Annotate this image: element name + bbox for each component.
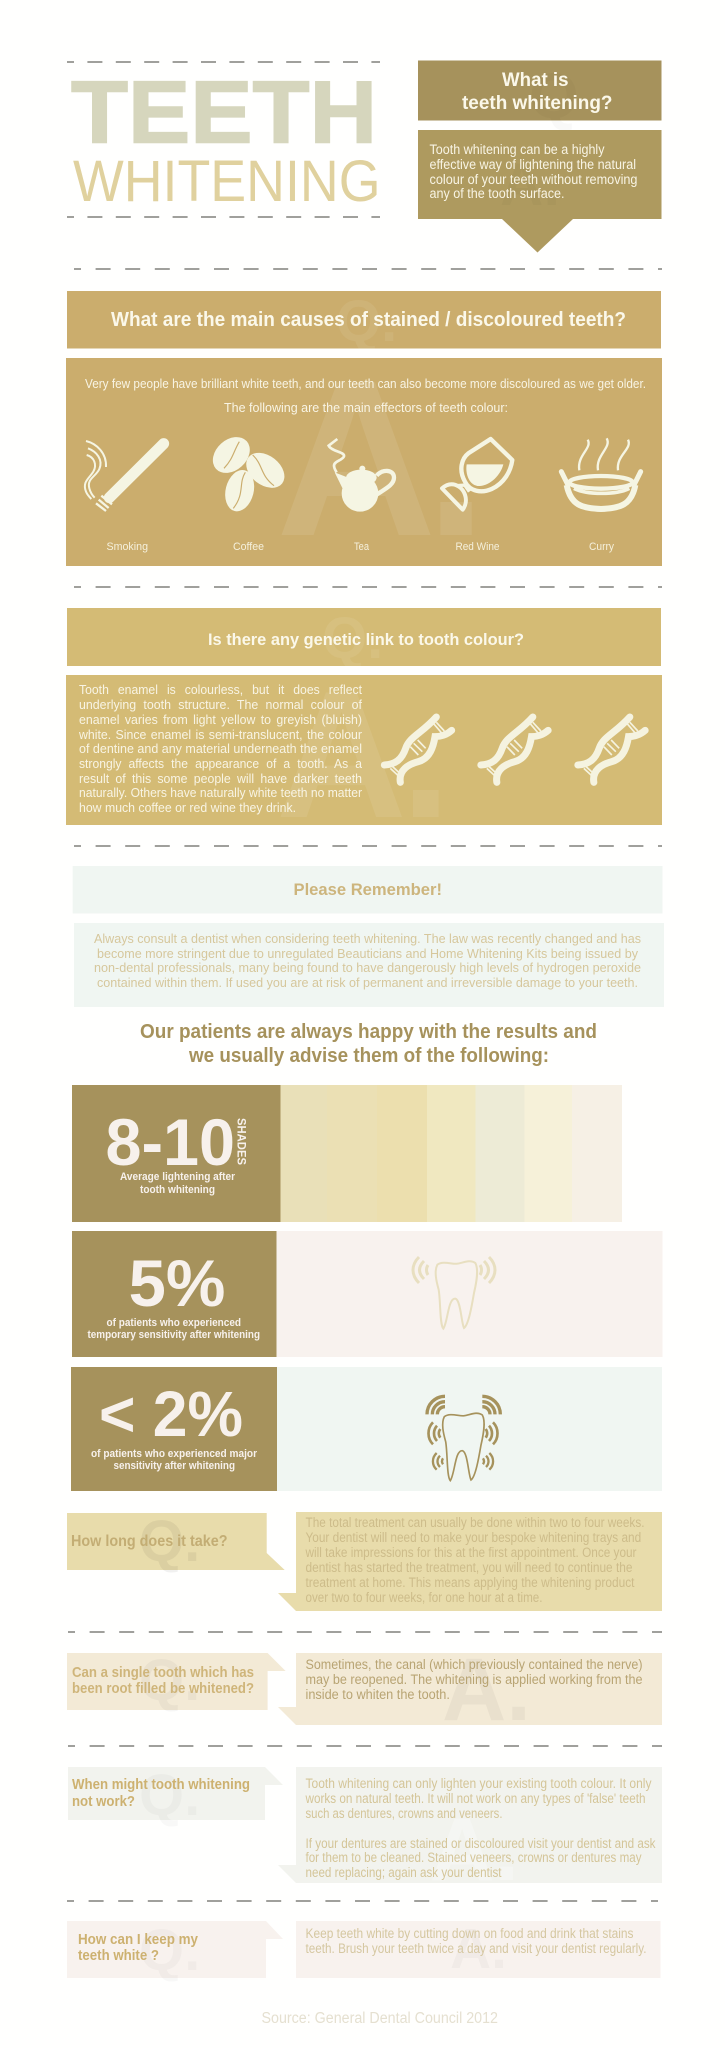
panel: please remember text: non-dental professionals, many being found to have dangerously high levels of hydrogen peroxide [94, 960, 641, 975]
panel: keep white answer [296, 1917, 660, 1981]
panel: root filled question: Can a single tooth which has [72, 1664, 254, 1681]
panel: root filled question: Q. [139, 1648, 200, 1713]
panel: keep white answer: A. [450, 1917, 507, 1981]
panel: causes answer: Very few people have brilliant white teeth, and our teeth can also become more discoloured as we get older. [85, 376, 646, 391]
panel: under 2% tooth [277, 1367, 662, 1491]
panel: under 2% stat: sensitivity after whitening [114, 1460, 235, 1472]
panel: when not work answer: Tooth whitening can only lighten your existing tooth colour. It only [306, 1776, 652, 1791]
panel: how long answer: The total treatment can usually be done within two to four weeks. [306, 1515, 644, 1530]
panel: what is teeth whitening heading: What is [502, 70, 568, 91]
panel: when not work answer: works on natural teeth. It will not work on any types of 'false' teeth [305, 1791, 646, 1806]
panel: what is teeth whitening answer: effective way of lightening the natural [430, 157, 636, 172]
panel: 8-10 shades stat: 8-10 [106, 1105, 235, 1179]
panel: 8-10 shades stat: SHADES [234, 1118, 248, 1165]
icon: dna 3 [578, 717, 645, 782]
panel: what is teeth whitening heading: Q [529, 60, 579, 132]
heading: patient results: we usually advise them of the following: [188, 1045, 549, 1067]
panel: under 2% stat: < 2% [99, 1378, 243, 1450]
label: Smoking: Smoking [106, 541, 148, 553]
panel: please remember text [74, 923, 664, 1007]
panel: genetic link question: Is there any genetic link to tooth colour? [208, 630, 524, 649]
panel: how long question [67, 1509, 285, 1574]
panel: keep white question [67, 1918, 283, 1983]
panel: genetic link answer: enamel varies from light yellow to greyish (bluish) [79, 712, 362, 727]
panel: 5% tooth [276, 1231, 662, 1357]
panel: causes question: What are the main causes of stained / discoloured teeth? [111, 309, 626, 331]
panel: when not work answer [278, 1767, 662, 1899]
panel: 5% stat: of patients who experienced [106, 1317, 241, 1329]
panel: genetic link answer: naturally. Others have naturally white teeth no matter [79, 785, 363, 800]
chart: shade strip [280, 1085, 622, 1222]
panel: keep white answer: Keep teeth white by cutting down on food and drink that stains [306, 1926, 634, 1941]
panel: root filled answer: inside to whiten the tooth. [306, 1687, 450, 1702]
label: Tea: Tea [354, 541, 370, 553]
panel: what is teeth whitening answer: Tooth whitening can be a highly [430, 142, 605, 157]
panel: keep white question: How can I keep my [78, 1931, 199, 1948]
panel: what is teeth whitening heading: teeth whitening? [462, 93, 612, 114]
panel: when not work answer: such as dentures, crowns and veneers. [306, 1806, 502, 1821]
panel: when not work answer: A. [430, 1799, 519, 1899]
panel: when not work answer: need replacing; again ask your dentist [306, 1865, 502, 1880]
heading: patient results: Our patients are always happy with the results and [140, 1021, 597, 1043]
icon: highly sensitive tooth [427, 1396, 500, 1481]
panel: please remember heading: Please Remember! [294, 880, 442, 899]
panel: keep white question: Q. [139, 1918, 200, 1983]
panel: genetic link answer: white. Since enamel is semi-translucent, the colour [78, 727, 363, 742]
panel: genetic link question [67, 606, 661, 671]
panel: causes answer: The following are the main effectors of teeth colour: [224, 400, 508, 415]
panel: when not work question: Q. [139, 1763, 200, 1828]
panel: what is teeth whitening answer: colour of your teeth without removing [430, 172, 638, 187]
panel: causes question [67, 289, 661, 354]
icon: dna 2 [481, 717, 548, 782]
panel: what is teeth whitening answer [418, 130, 662, 252]
panel: how long question: Q. [139, 1509, 200, 1574]
panel: how long answer: over two to four weeks, for one hour at a time. [306, 1590, 542, 1605]
panel: root filled question: been root filled be whitened? [72, 1680, 254, 1697]
panel: 5% stat: 5% [129, 1246, 226, 1320]
panel: keep white answer: teeth. Brush your teeth twice a day and visit your dentist regularly. [306, 1941, 646, 1956]
panel: root filled answer: Sometimes, the canal (which previously contained the nerve) [306, 1657, 642, 1672]
panel: causes answer: A. [276, 335, 476, 583]
panel: what is teeth whitening answer: A. [500, 151, 560, 218]
icon: coffee beans [206, 430, 291, 514]
icon: red wine glass [442, 439, 512, 510]
label: Coffee: Coffee [233, 541, 264, 553]
panel: how long answer [278, 1512, 662, 1611]
heading: patient results [140, 1021, 597, 1067]
icon: smoking [85, 441, 164, 511]
panel: 8-10 shades stat: tooth whitening [140, 1184, 215, 1196]
panel: please remember text: Always consult a dentist when considering teeth whitening. The law was recently changed and has [94, 931, 641, 946]
panel: when not work question [68, 1763, 283, 1828]
panel: root filled question [67, 1648, 286, 1713]
panel: please remember text: contained within them. If used you are at risk of permanent and irreversible damage to your teeth. [97, 975, 638, 990]
panel: 5% stat [72, 1231, 276, 1357]
title: Teeth Whitening: TEETH [71, 62, 377, 162]
panel: root filled answer [278, 1639, 662, 1739]
panel: genetic link answer [66, 654, 662, 856]
panel: genetic link answer: of dentine and any material underneath the enamel [79, 741, 362, 756]
panel: how long answer: dentist has started the treatment, you will need to continue the [306, 1560, 632, 1575]
label: Curry: Curry [589, 541, 614, 553]
panel: how long answer: Your dentist will need to make your bespoke whitening trays and [306, 1530, 641, 1545]
panel: please remember heading [73, 866, 662, 914]
panel: how long question: How long does it take? [71, 1533, 228, 1550]
panel: how long answer: will take impressions for this at the first appointment. Once your [305, 1545, 637, 1560]
panel: 8-10 shades stat: Average lightening after [120, 1171, 236, 1183]
panel: genetic link answer: how much coffee or red wine they drink. [79, 800, 296, 815]
panel: genetic link answer: A. [276, 654, 445, 856]
panel: when not work question: When might tooth whitening [72, 1776, 250, 1793]
panel: genetic link question: Q. [322, 606, 383, 671]
panel: under 2% stat [71, 1367, 277, 1491]
title: Teeth Whitening [67, 62, 380, 217]
title: Teeth Whitening: WHITENING [73, 149, 380, 214]
panel: root filled answer: A. [442, 1639, 531, 1739]
panel: causes answer [66, 335, 662, 583]
panel: genetic link answer: result of this some people will have darker teeth [79, 771, 362, 786]
panel: 5% stat: temporary sensitivity after whitening [88, 1329, 260, 1341]
panel: what is teeth whitening heading [418, 60, 662, 132]
icon: lightly sensitive tooth [413, 1257, 495, 1329]
panel: genetic link answer: Tooth enamel is colourless, but it does reflect [79, 682, 362, 697]
panel: how long answer: treatment at home. This means applying the whitening product [306, 1575, 635, 1590]
panel: genetic link answer: strongly affects the appearance of a tooth. As a [79, 756, 363, 771]
panel: causes question: Q. [336, 289, 397, 354]
panel: please remember text: become more stringent due to unregulated Beauticians and Home Whitening Kits being issued by [97, 946, 638, 961]
panel: when not work answer: for them to be cleaned. Stained veneers, crowns or dentures may [306, 1850, 642, 1865]
panel: 8-10 shades stat [72, 1085, 280, 1222]
panel: under 2% stat: of patients who experienced major [91, 1448, 258, 1460]
panel: when not work question: not work? [72, 1793, 135, 1810]
panel: when not work answer: If your dentures are stained or discoloured visit your dentist and ask [306, 1836, 656, 1851]
panel: root filled answer: may be reopened. The whitening is applied working from the [306, 1672, 642, 1687]
label: Red Wine: Red Wine [456, 541, 500, 553]
panel: genetic link answer: underlying tooth structure. The normal colour of [79, 697, 362, 712]
icon: curry bowl [561, 438, 641, 509]
icon: teapot [329, 439, 394, 512]
source credit: Source: General Dental Council 2012 [262, 2010, 498, 2027]
icon: dna 1 [384, 717, 452, 782]
panel: what is teeth whitening answer: any of the tooth surface. [430, 186, 564, 201]
panel: keep white question: teeth white ? [78, 1947, 159, 1964]
